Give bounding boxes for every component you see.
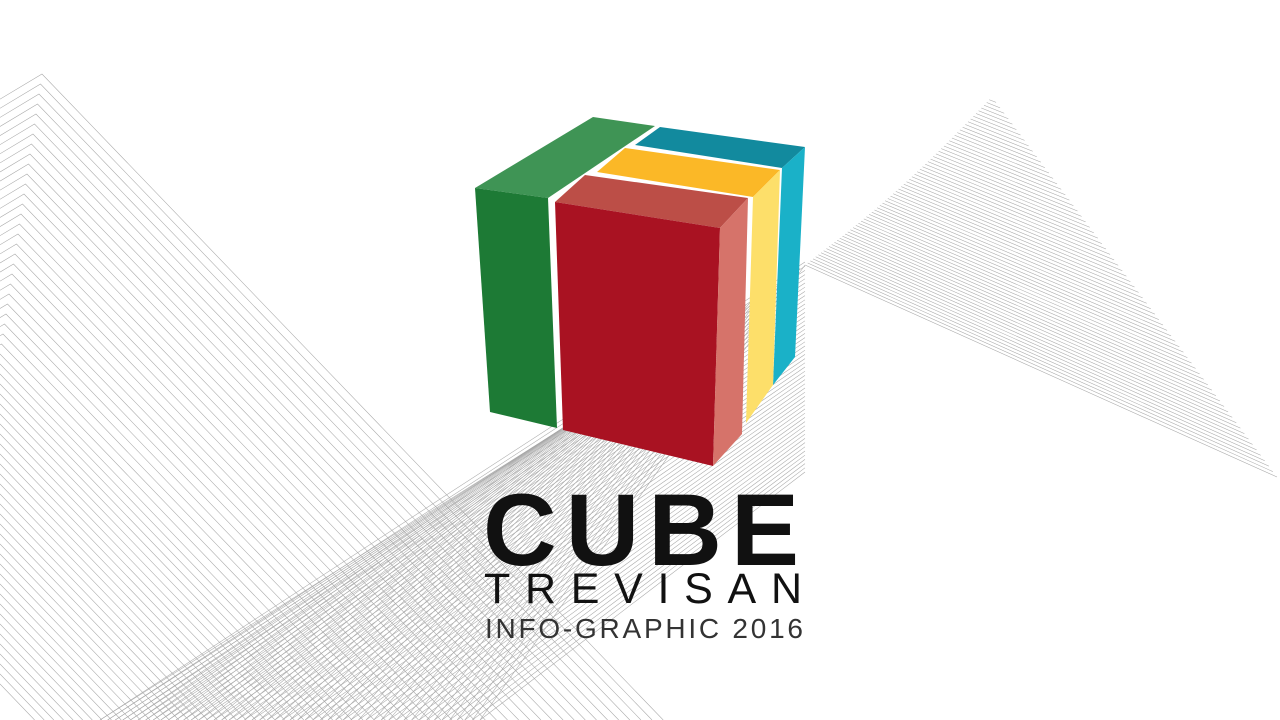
green block [475,117,655,428]
yellow block [597,148,780,423]
teal block [635,127,805,385]
subtitle: TREVISAN: TREVISAN [484,565,802,613]
title: CUBE: CUBE [483,473,799,587]
caption: INFO-GRAPHIC 2016: INFO-GRAPHIC 2016 [485,613,803,644]
red block [555,175,748,466]
